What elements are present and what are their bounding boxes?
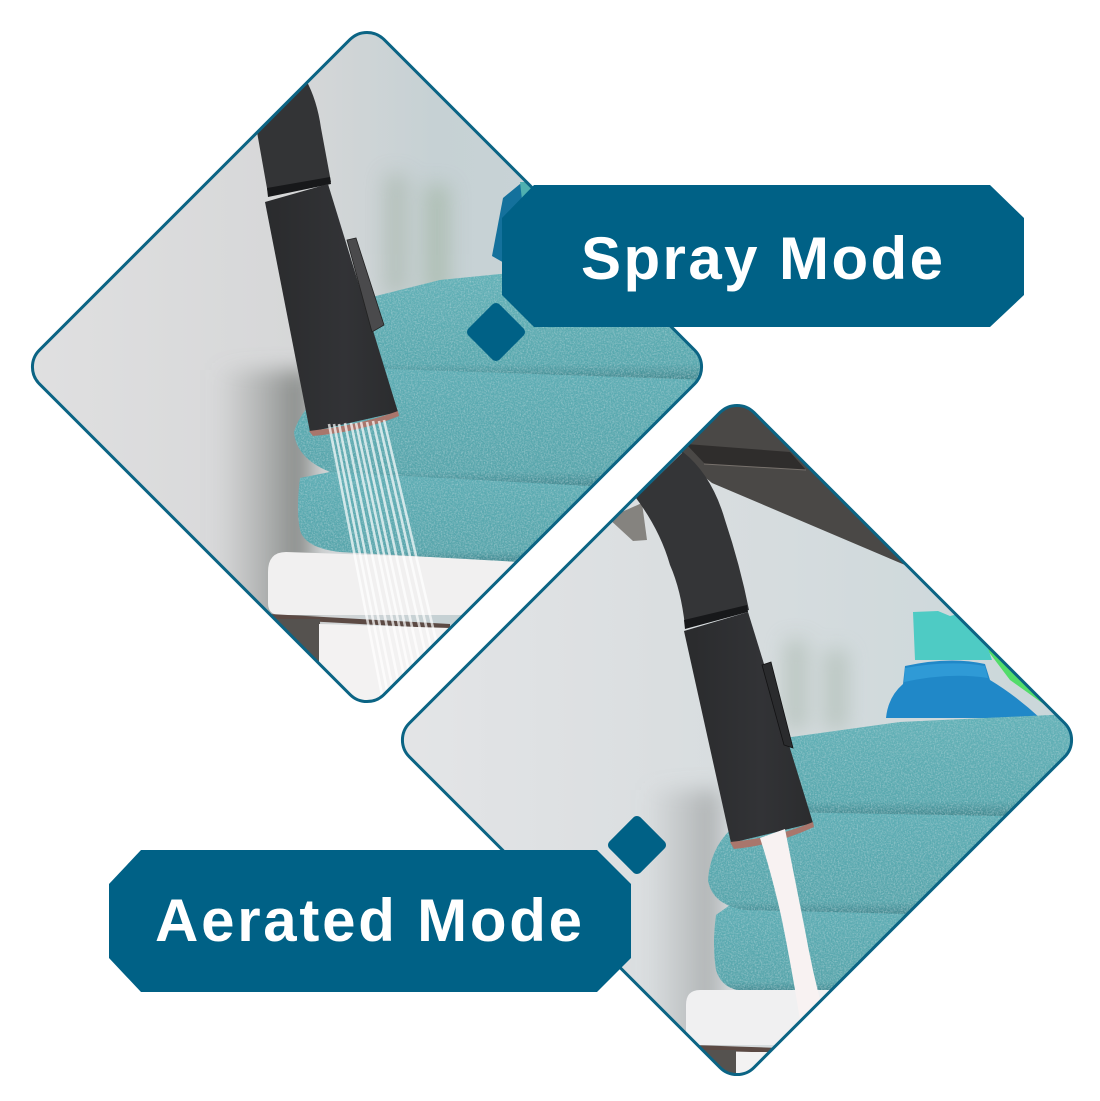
white shelf — [686, 990, 830, 1073]
aerated water stream — [760, 829, 818, 990]
detergent bottle — [886, 610, 1045, 718]
label: aerated mode — [109, 850, 631, 992]
towel stack — [708, 714, 1080, 992]
blurred wall shadow — [215, 370, 310, 660]
blurred plant background — [385, 175, 449, 295]
diamond outline — [392, 395, 1082, 1085]
heading: spray mode: Spray Mode — [581, 225, 943, 292]
white shelf — [268, 552, 520, 710]
faucet curved tube — [636, 452, 749, 626]
faucet tube — [257, 80, 331, 194]
label: spray mode — [502, 185, 1024, 327]
heading: aerated mode: Aerated Mode — [155, 887, 582, 954]
blurred plant background — [785, 640, 847, 730]
icon: aerated pointer diamond — [606, 814, 668, 876]
blurred wall shadow — [659, 783, 729, 1046]
metal bracket — [612, 504, 647, 541]
diamond outline — [22, 22, 712, 712]
panel: spray mode photo — [20, 20, 720, 712]
blue bottle behind label — [492, 184, 522, 262]
wall background — [404, 453, 1054, 1052]
spray water streams — [328, 420, 437, 694]
towel stack — [294, 270, 720, 562]
faucet spray head — [265, 177, 399, 436]
wall background — [34, 34, 524, 627]
dark countertop — [682, 407, 904, 565]
icon: spray pointer diamond — [465, 301, 527, 363]
faucet aerator head — [684, 605, 814, 849]
panel: aerated mode photo — [390, 395, 1082, 1085]
